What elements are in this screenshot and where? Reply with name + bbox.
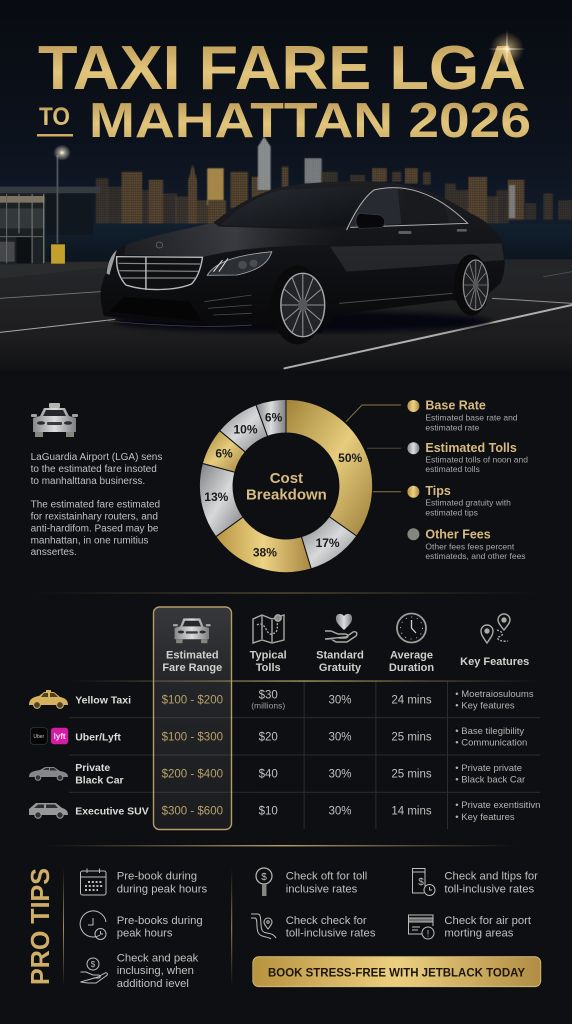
icon: yellow taxi [29,690,68,708]
column headers: Key Features [460,656,529,668]
icon: suv [29,803,68,818]
legend item: estimated tolls [407,441,528,474]
icon: taxi front view [31,403,78,437]
tip: card with alert: ! [427,928,429,938]
row: yellow taxi: $30 [259,689,278,701]
percentage labels: 50% [338,451,363,465]
icon: clock [397,614,426,642]
icon: uber: Uber [33,734,45,740]
front left headlight sliver [107,250,117,275]
icon: toll map [253,615,284,643]
row: yellow taxi: • Key features [455,700,515,711]
percentage labels: 38% [253,546,277,560]
column headers: Fare Range [162,662,222,674]
tip: road with pin [251,914,376,939]
tip: calendar: during peak hours [117,884,207,896]
tip: calendar [80,868,207,896]
segment: 50% [286,399,373,536]
legend item: other fees: estimateds, and other fees [425,551,526,561]
tip: phone with clock [412,868,538,896]
legend item: other fees [407,528,526,561]
row: private black car: • Black back Car [455,774,525,785]
row: executive suv: • Key features [455,812,515,823]
row: yellow taxi [29,689,534,711]
tip: phone with clock: toll-inclusive rates [444,884,535,896]
row: private black car: • Private private [455,763,522,774]
row: yellow taxi: $100 - $200 [162,694,223,706]
yellow bollard [51,244,65,264]
table grid [69,680,540,829]
percentage labels: 13% [204,490,229,504]
tip: phone with clock: Check and ltips for [444,871,538,883]
row: private black car [29,762,525,786]
side windows [349,188,401,227]
legend item: estimated tolls: Estimated Tolls [425,441,517,455]
cta button: BOOK STRESS-FREE WITH JETBLACK TODAY [268,966,525,980]
side mirror [356,213,385,228]
legend item: tips: Tips [425,484,451,498]
icon: route pins [481,614,510,643]
column headers: Estimated [166,650,219,662]
legend item: tips: estimated tips [425,507,478,517]
donut chart: cost breakdown [199,399,373,573]
row: uber and lyft: • Communication [455,737,527,748]
row: uber and lyft: $100 - $300 [162,731,223,743]
pro tips heading: PRO TIPS [25,868,55,985]
row: uber and lyft: • Base tilegibility [455,726,524,737]
row: yellow taxi: 30% [328,694,352,706]
legend item: other fees: Other Fees [425,528,491,542]
row: executive suv: $300 - $600 [162,806,223,818]
segment: 10% [220,405,268,452]
airport terminal [0,187,100,264]
ground [0,262,572,370]
legend item: other fees: Other fees fees percent [425,541,515,551]
intro text: to manhalttana businerss. [31,476,145,487]
hood reflection [124,223,347,257]
percentage labels: 6% [265,411,283,425]
hood star [156,242,163,248]
column headers: Average [390,650,433,662]
parking lines [0,272,572,368]
cta button [253,957,541,987]
column headers [162,650,529,674]
percentage labels: 6% [215,447,233,461]
row: private black car: Black Car [75,774,124,786]
tip: hand with coin: Check and peak [117,952,199,964]
panel: cost breakdown intro [31,403,162,558]
legend item: base rate [407,398,518,432]
legend item: base rate: estimated rate [425,422,480,432]
tip: toll coin marker: $ [261,872,267,883]
headlight [207,252,272,275]
lower bumper intake [106,295,252,326]
legend item: tips [407,484,511,517]
segment: 38% [216,517,311,573]
tip: card with alert [408,915,532,939]
segment: 6% silver [256,399,286,436]
row: uber and lyft: 25 mins [391,731,432,743]
donut center label [246,470,327,504]
door reflection [330,243,504,272]
donut center label: Breakdown [246,486,327,504]
tip: toll coin marker [256,868,367,896]
title line 2: MAHATTAN 2026 [89,94,531,148]
intro text: anssertes. [31,547,77,558]
front wheel [271,266,325,344]
row: private black car: 25 mins [391,768,432,780]
tip: clock: peak hours [117,927,173,939]
column headers: Tolls [256,662,281,674]
rear wheel [454,254,489,316]
tip: road with pin: Check check for [286,915,367,927]
comparison table [29,607,540,830]
row: yellow taxi: • Moetraiosuloums [455,689,534,700]
title line 1: TAXI FARE LGA [38,34,526,103]
row: uber and lyft: Uber/Lyft [75,731,121,743]
row: private black car: 30% [328,768,352,780]
icon: uber [30,728,47,744]
intro text [31,452,162,558]
river [0,224,572,262]
car shadow [113,311,492,332]
tip: calendar: Pre-book during [117,871,197,883]
legend leader lines [346,405,401,492]
icon: lyft: lyft [54,732,66,741]
door handles [398,231,411,234]
legend item: base rate: Base Rate [425,398,486,412]
curb [0,262,108,278]
segment: 17% [301,517,357,569]
segment: 13% [199,463,243,537]
segment: 6% gold [202,430,245,472]
icon: gratuity hand and heart [325,614,357,642]
intro text: manhattan, in one rumitius [31,536,148,546]
row: private black car: $40 [259,768,278,780]
row: private black car: $200 - $400 [162,768,223,780]
tip: toll coin marker: inclusive rates [286,884,358,896]
icon: sedan [29,767,68,780]
intro text: for rexistainhary routers, and [31,512,158,522]
row: uber and lyft: $20 [259,731,278,743]
tip: card with alert: Check for air port [444,915,532,927]
panel: pro tips [25,868,541,990]
grille [117,257,202,290]
row: uber and lyft [30,726,527,748]
title [37,34,531,148]
legend item: base rate: Estimated base rate and [425,412,518,422]
car body [101,181,505,333]
manhattan skyline [96,137,572,223]
legend [407,398,528,561]
tip: hand with coin [80,952,199,990]
row: executive suv: 30% [328,806,352,818]
window chrome trim [347,188,468,230]
column headers: Duration [389,662,434,674]
tip: phone with clock: $ [418,877,424,888]
icon: lyft [51,728,68,744]
row: executive suv: Executive SUV [75,806,149,818]
percentage labels [204,411,363,560]
legend item: estimated tolls: estimated tolls [425,464,480,474]
highlighted fare column [154,607,232,830]
lens flare [488,30,526,68]
row: executive suv: • Private exentisitivn [455,800,540,811]
intro text: anti-hardifom. Pased may be [31,524,159,534]
tip: card with alert: morting areas [444,927,514,939]
row: yellow taxi: (millions) [251,700,285,710]
title small word: to: TO [39,103,70,131]
night sky [0,0,572,230]
tip: road with pin: toll-inclusive rates [286,927,376,939]
street lamp [53,145,71,243]
windshield [221,186,367,227]
tip: clock: Pre-books during [117,915,203,927]
percentage labels: 17% [316,536,340,550]
donut center label: Cost [270,470,303,487]
intro text: LaGuardia Airport (LGA) sens [31,452,162,463]
seawall [500,259,572,266]
tip: hand with coin: $ [91,960,96,969]
legend item: tips: Estimated gratuity with [425,498,511,508]
hero photo: airport at night with black sedan [0,0,572,370]
intro text: to the estimated fare insoted [31,464,157,475]
legend item: estimated tolls: Estimated tolls of noon and [425,454,528,464]
tip: hand with coin: additiond ievel [117,978,189,990]
row: executive suv: 14 mins [391,806,432,818]
column headers: Standard [316,650,364,662]
row: yellow taxi: 24 mins [391,694,432,706]
tip: clock [80,911,203,940]
intro text: The estimated fare estimated [31,500,160,510]
column headers: Typical [250,650,287,662]
row: executive suv [29,800,540,823]
row: private black car: Private [75,762,110,774]
column headers: Gratuity [319,662,362,674]
row: uber and lyft: 30% [328,731,352,743]
percentage labels: 10% [233,422,258,436]
row: yellow taxi: Yellow Taxi [75,694,131,706]
row: executive suv: $10 [259,806,278,818]
tip: toll coin marker: Check oft for toll [286,871,367,883]
tip: hand with coin: inclusing, when [117,965,194,977]
black sedan [101,181,505,344]
icon: fare car [173,618,211,643]
